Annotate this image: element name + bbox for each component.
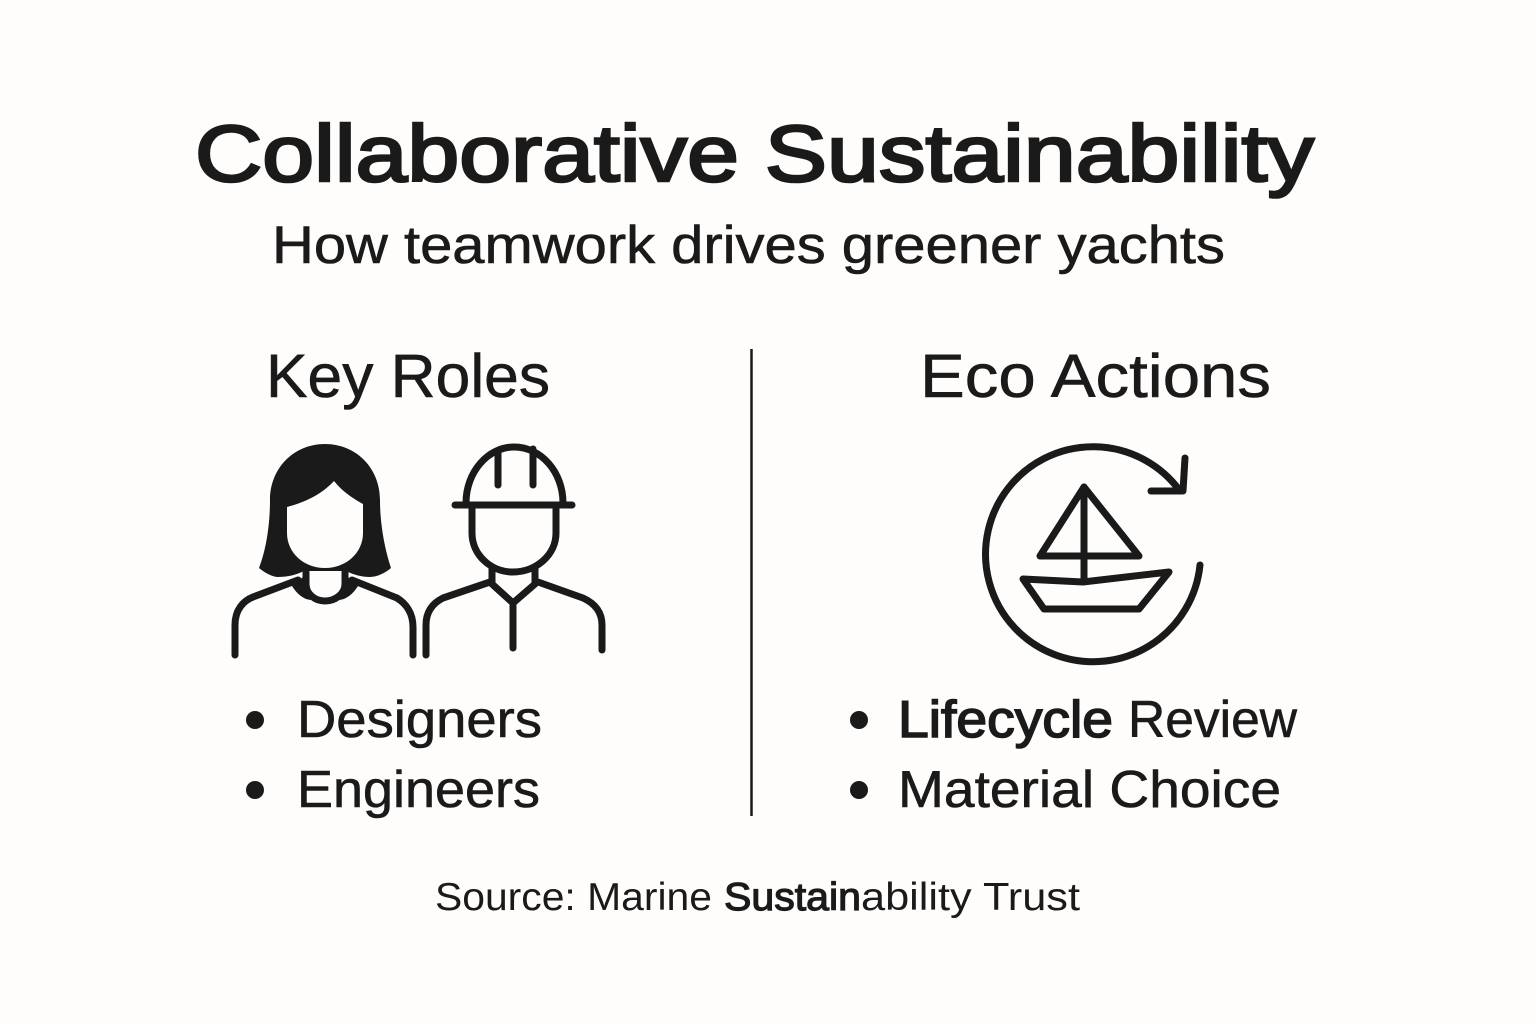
title: Collaborative Sustainability [195, 109, 1314, 198]
subtitle: How teamwork drives greener yachts [272, 216, 1225, 275]
source: Source: Marine [435, 876, 712, 919]
list: eco actions: Lifecycle [898, 691, 1113, 749]
icon: designer woman [235, 444, 413, 655]
source: Sustain [724, 876, 861, 919]
list: eco actions: Material Choice [898, 761, 1281, 819]
list: key roles: Designers [297, 691, 542, 749]
list: eco actions: Review [1128, 691, 1297, 749]
icon: boat in lifecycle arrow [986, 447, 1200, 662]
heading: eco actions: Eco Actions [920, 342, 1271, 410]
heading: key roles: Key Roles [266, 342, 550, 410]
source: ability Trust [861, 876, 1080, 919]
list: key roles: Engineers [297, 761, 540, 819]
icon: engineer with hard hat [426, 447, 602, 655]
list: key roles [246, 691, 542, 819]
list: eco actions [850, 691, 1297, 819]
